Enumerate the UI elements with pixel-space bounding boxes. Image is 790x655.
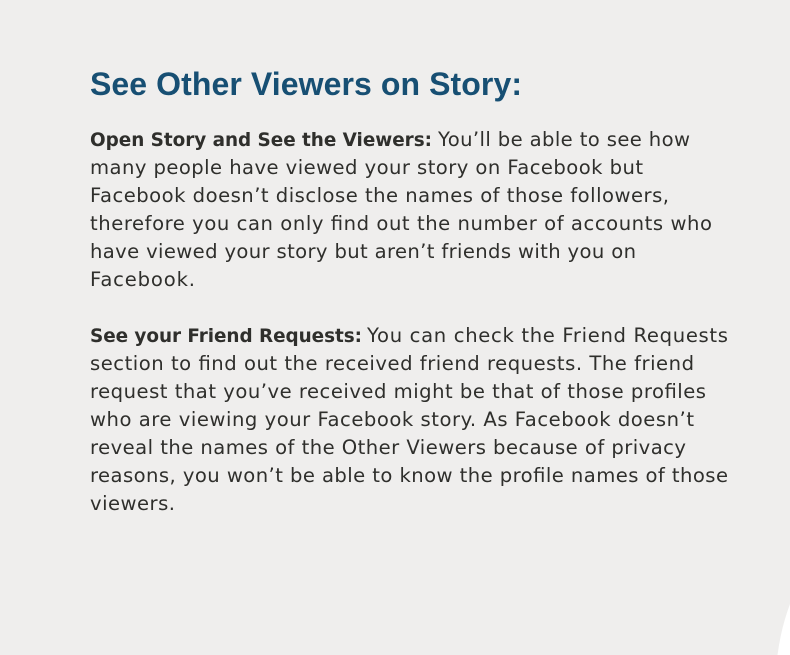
text block: open story: Facebook. — [90, 268, 195, 291]
text block: open story — [90, 128, 712, 291]
text block: open story: have viewed your story but aren’t friends with you on — [90, 240, 636, 263]
title: See Other Viewers on Story: — [90, 66, 522, 102]
text block: friend requests: who are viewing your Facebook story. As Facebook doesn’t — [90, 408, 694, 431]
text block: friend requests: viewers. — [90, 492, 175, 515]
text block: open story: Facebook doesn’t disclose the names of those followers, — [90, 184, 669, 207]
text block: open story: Open Story and See the Viewers: — [90, 130, 432, 151]
text block: open story: many people have viewed your story on Facebook but — [90, 156, 643, 179]
text block: friend requests: section to find out the received friend requests. The friend — [90, 352, 694, 375]
text block: friend requests: You can check the Friend Requests — [366, 324, 728, 347]
text block: open story: therefore you can only find out the number of accounts who — [90, 212, 712, 235]
text block: friend requests: reasons, you won’t be able to know the profile names of those — [90, 464, 728, 487]
text block: friend requests: reveal the names of the Other Viewers because of privacy — [90, 436, 686, 459]
text block: friend requests: request that you’ve received might be that of those profiles — [90, 380, 706, 403]
text block: open story: You’ll be able to see how — [437, 128, 690, 151]
white corner shape — [778, 604, 790, 655]
text block: friend requests — [90, 324, 728, 515]
text block: friend requests: See your Friend Requests: — [90, 326, 362, 347]
